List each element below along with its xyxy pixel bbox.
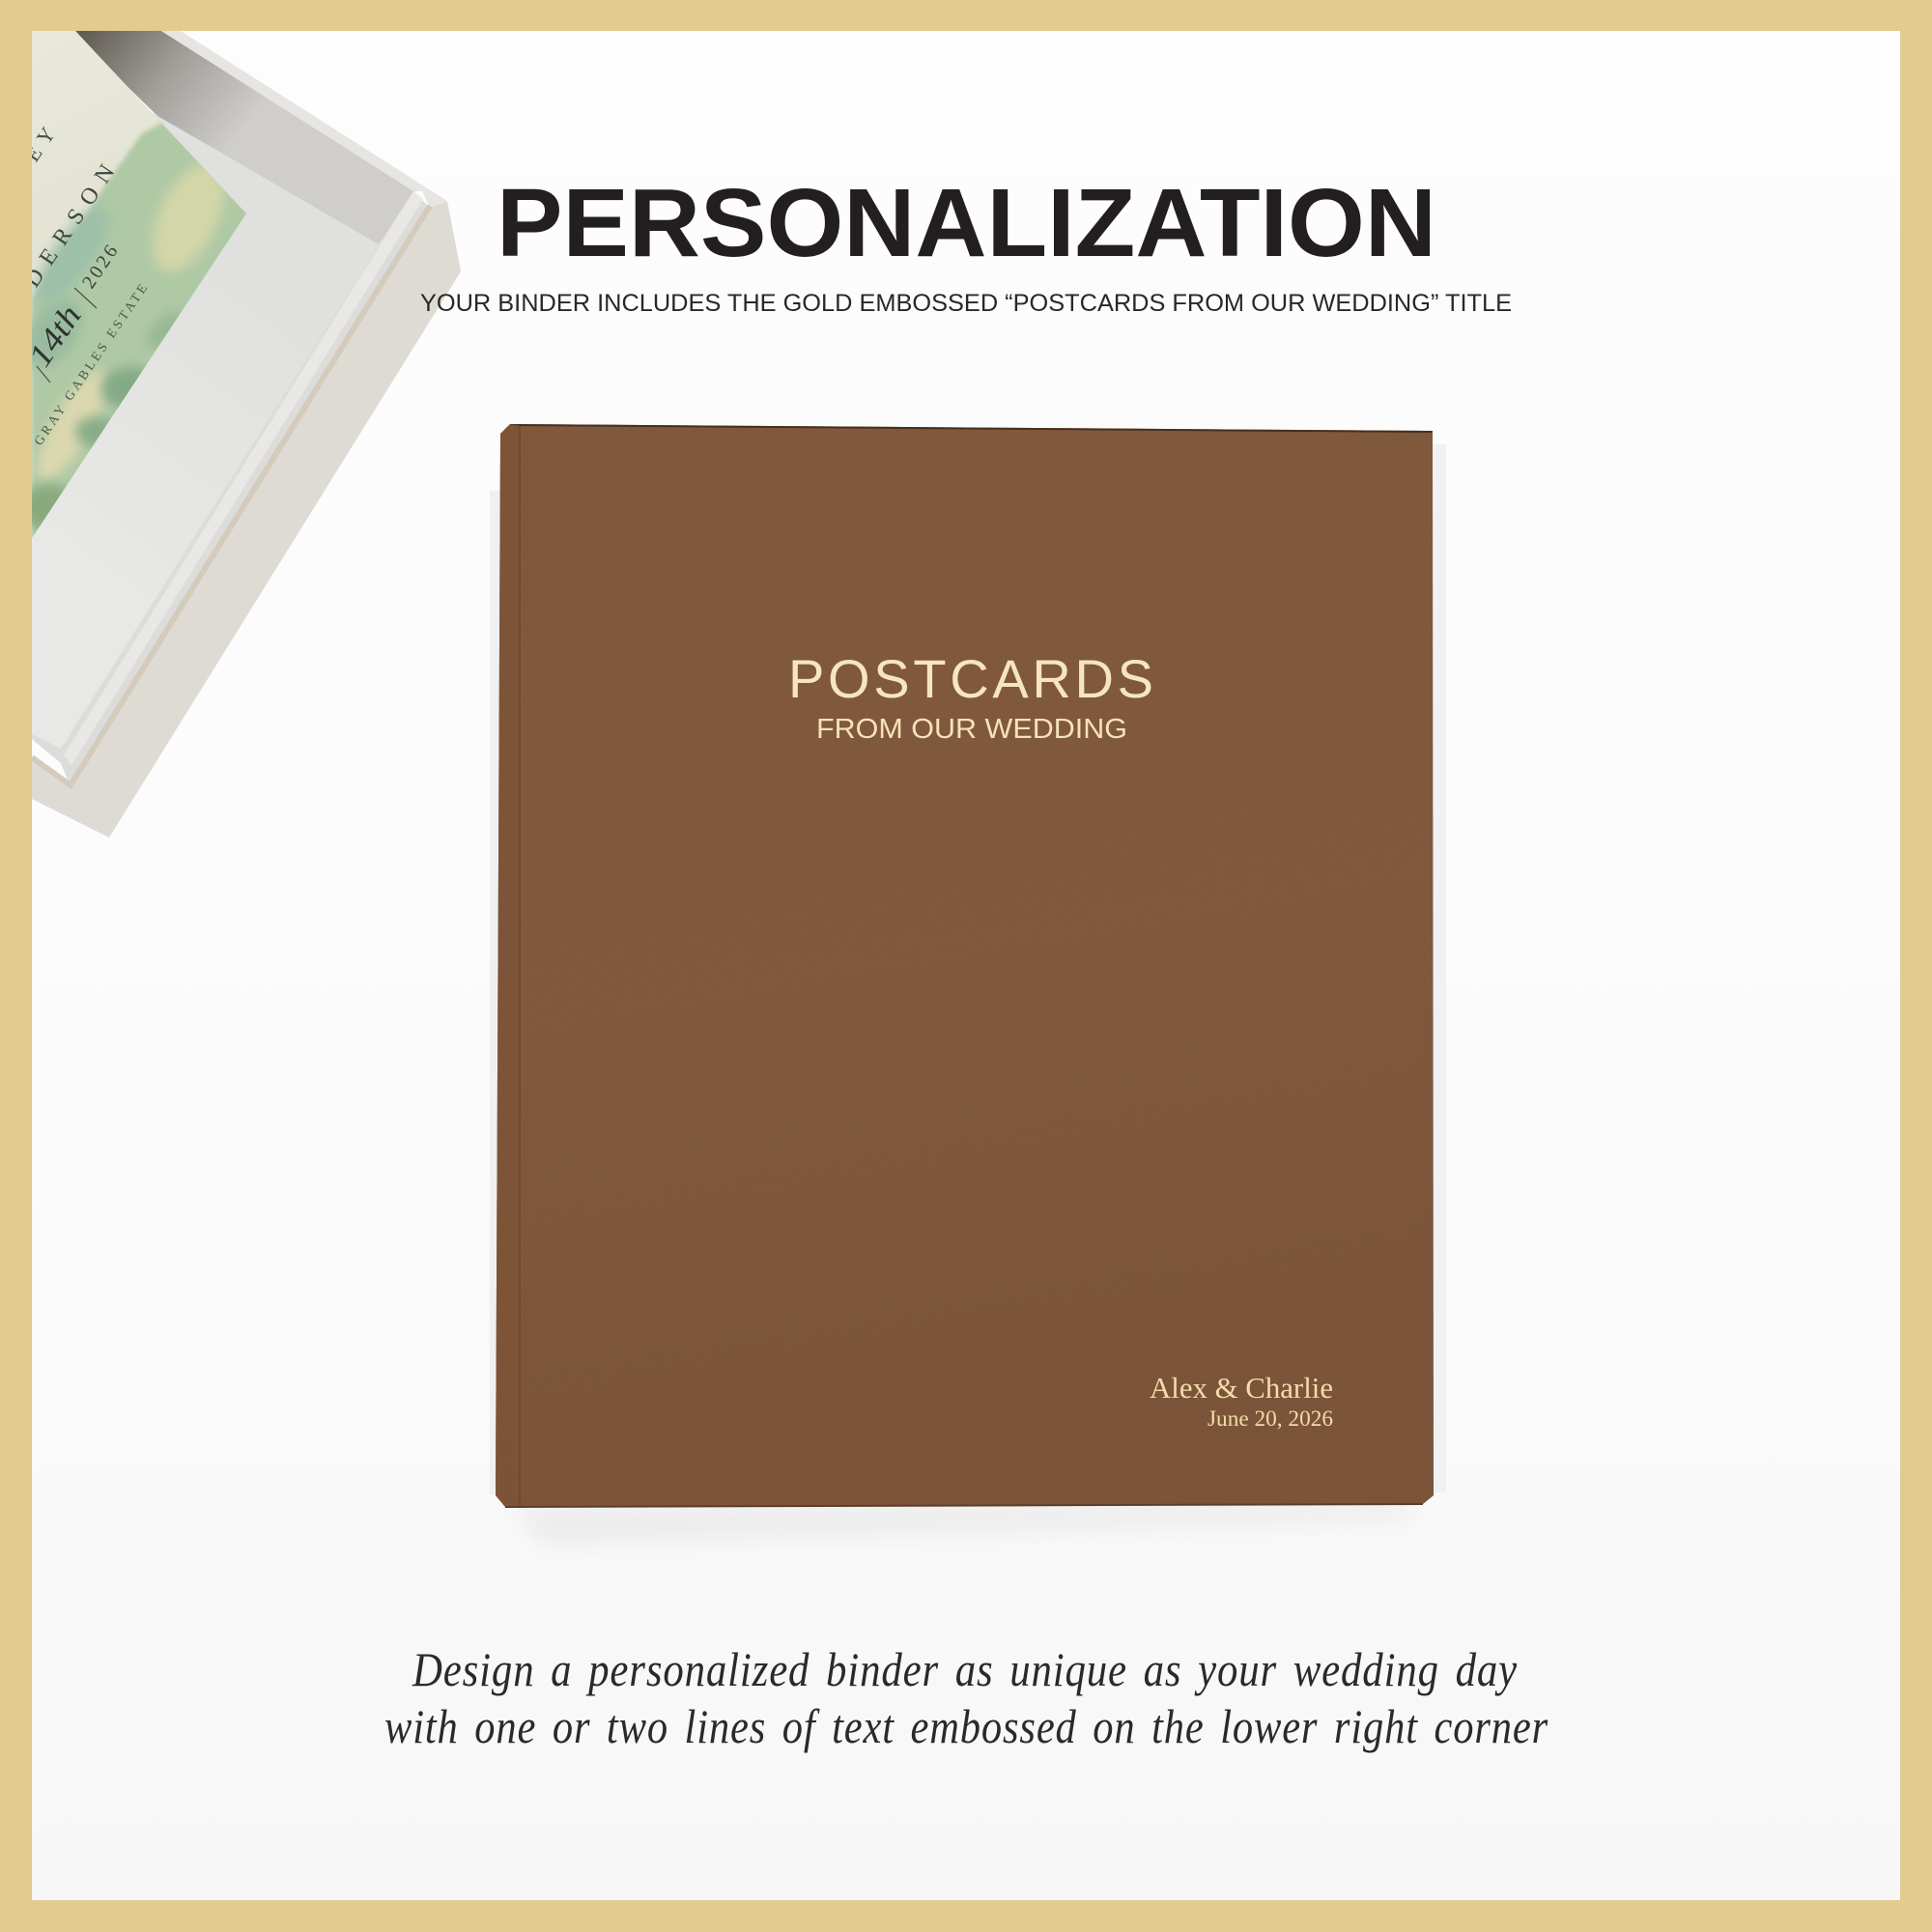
rim highlight	[64, 191, 423, 765]
photo: open box with invitation card	[12, 31, 461, 838]
box top rim	[161, 31, 447, 208]
card text: date: 2026	[78, 239, 124, 293]
cover date: June 20, 2026	[1208, 1406, 1333, 1431]
cover names: Alex & Charlie	[1150, 1371, 1333, 1405]
tagline	[384, 1642, 1548, 1753]
title: PERSONALIZATION	[497, 169, 1436, 277]
cover title: POSTCARDS	[788, 648, 1153, 709]
binder	[490, 424, 1446, 1546]
box wall seam	[32, 206, 430, 785]
tagline line 1: Design a personalized binder as unique as your wedding day	[412, 1642, 1518, 1696]
box floor	[32, 112, 379, 749]
tagline line 2: with one or two lines of text embossed on the lower right corner	[384, 1699, 1548, 1753]
binder cover	[496, 424, 1434, 1507]
card text: surname top: EY	[19, 116, 64, 166]
card text: surname: DERSON	[19, 160, 120, 292]
cover texture	[496, 424, 1434, 1507]
invitation card	[32, 31, 246, 538]
box back wall	[75, 31, 415, 244]
binder shadows	[490, 444, 1446, 1546]
watercolor hills	[12, 122, 256, 551]
spine groove	[519, 426, 521, 1507]
subtitle: YOUR BINDER INCLUDES THE GOLD EMBOSSED “POSTCARDS FROM OUR WEDDING” TITLE	[420, 290, 1512, 317]
card cream paper	[32, 31, 254, 543]
box inner rim strip	[32, 191, 430, 787]
card text: venue: GRAY GABLES ESTATE	[31, 279, 152, 448]
binder bottom edge	[505, 1504, 1423, 1507]
card text: day: 14th	[22, 298, 89, 373]
cover subtitle: FROM OUR WEDDING	[816, 714, 1127, 745]
binder spine	[496, 424, 520, 1507]
box outer wall	[32, 201, 461, 838]
binder top edge	[510, 425, 1433, 432]
card divider lines	[37, 288, 97, 383]
